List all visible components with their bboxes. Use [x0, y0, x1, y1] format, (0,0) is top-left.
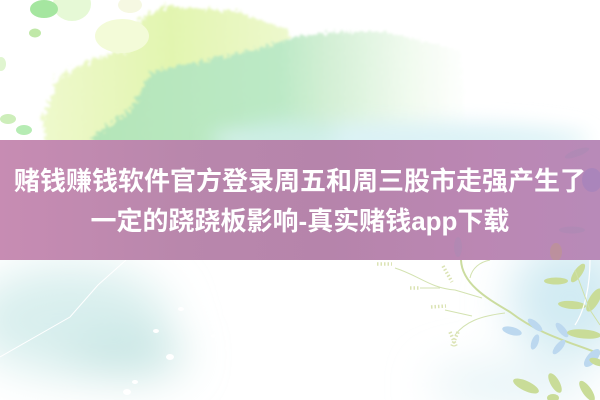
headline text: 一定的跷跷板影响-真实赌钱app下载	[91, 206, 509, 236]
wash: yellow-green splash	[42, 6, 290, 150]
decorative green dots, top left	[0, 0, 149, 135]
flower buds	[377, 264, 458, 346]
headline text: 赌钱赚钱软件官方登录周五和周三股市走强产生了	[14, 166, 586, 196]
purple title banner	[0, 140, 600, 260]
branch with buds and leaves, bottom right	[377, 260, 600, 400]
white thread and dots, bottom left	[0, 260, 229, 395]
headline text	[14, 166, 586, 236]
wash: green splash	[90, 32, 470, 150]
wash: lower haze	[0, 240, 600, 400]
banner leaf silhouettes	[454, 168, 600, 260]
wash: pale blue haze	[210, 121, 590, 158]
